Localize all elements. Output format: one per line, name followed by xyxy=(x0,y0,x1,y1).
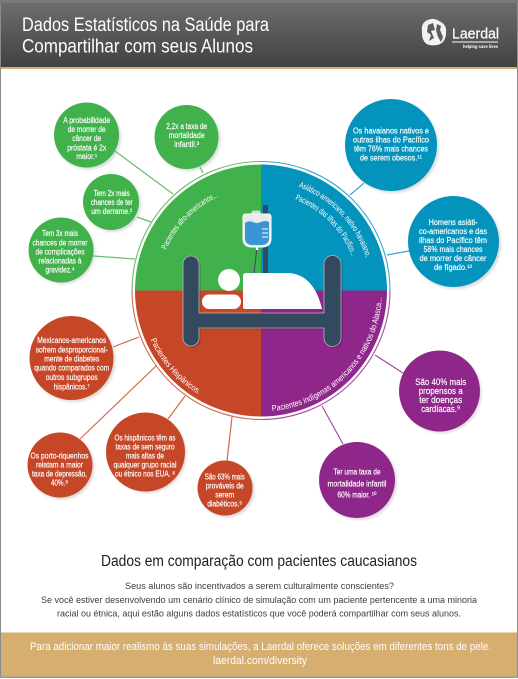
logo: Laerdal: Laerdal xyxy=(452,26,499,42)
icon: hospital bed with patient xyxy=(183,256,342,348)
circle: mortalidade infantil: mortalidade xyxy=(169,131,205,140)
circle: mortalidade infantil: infantil.³ xyxy=(174,140,199,149)
circle: diabetes mexicanos-americanos: outros subgrupos xyxy=(46,373,98,382)
circle: gravidez: de complicações xyxy=(36,248,84,256)
circle: diabetes mexicanos-americanos: mente de diabetes xyxy=(44,354,99,364)
circle: derrame: Tem 2x mais xyxy=(94,189,130,198)
circle: gravidez: gravidez.⁴ xyxy=(46,266,75,274)
circle: câncer de fígado: 58% mais chances xyxy=(424,245,482,254)
title: Dados Estatísticos na Saúde para xyxy=(22,15,269,36)
outer ring xyxy=(132,162,390,420)
circle: diabetes mexicanos-americanos: Mexicanos-americanos xyxy=(37,336,106,345)
circle: doenças cardíacas: São 40% mais xyxy=(415,376,466,387)
circle: câncer de fígado: co-americanos e das xyxy=(419,227,487,236)
intro paragraph: Seus alunos são incentivados a serem culturalmente conscientes? xyxy=(125,580,394,591)
circle: câncer de fígado xyxy=(408,196,501,289)
arc label: afro-americanos: Pacientes afro-americanos... xyxy=(161,196,218,250)
circle: sem seguro: Os hispânicos têm as xyxy=(114,433,176,442)
arc label: ilhas do Pacífico: Pacientes das Ilhas do Pacífico... xyxy=(296,194,354,256)
circle: derrame: chances de ter xyxy=(91,198,133,207)
circle: obesos xyxy=(345,99,439,193)
patient head xyxy=(218,269,240,291)
circle: sem seguro: taxas de sem seguro xyxy=(116,442,175,451)
circle: obesos: outras ilhas do Pacífico xyxy=(353,136,429,145)
circle: doenças cardíacas: ter doenças xyxy=(419,394,462,405)
circle: depressão: taxa de depressão, xyxy=(32,470,87,478)
circle: gravidez xyxy=(28,218,95,284)
pillow xyxy=(202,294,241,309)
intro paragraph xyxy=(41,580,478,618)
circle: doenças cardíacas: propensos a xyxy=(419,385,463,396)
circle: mortalidade infantil: 2,2x a taxa de xyxy=(166,122,208,131)
circle: sem seguro xyxy=(106,412,186,493)
circle: diabéticos: diabéticos.⁵ xyxy=(207,500,242,509)
title: Compartilhar com seus Alunos xyxy=(22,36,253,58)
circle: sem seguro: mais altas de xyxy=(126,451,164,460)
circle: mortalidade infantil indígena: mortalidade infantil xyxy=(328,480,387,488)
circle: depressão: relatam a maior xyxy=(36,460,83,470)
circle: diabéticos xyxy=(198,460,254,518)
logo: Laerdal: helping save lives xyxy=(463,44,499,49)
footer band xyxy=(0,632,518,679)
intro paragraph: racial ou étnica, aqui estão alguns dados estatísticos que você poderá compartilhar com seus alunos. xyxy=(57,608,461,618)
main circle xyxy=(132,162,390,420)
circle: diabetes mexicanos-americanos xyxy=(30,316,116,402)
heading: comparação: Dados em comparação com pacientes caucasianos xyxy=(101,553,417,570)
circle: diabéticos: prováveis de xyxy=(206,481,244,490)
circle: mortalidade infantil indígena: Ter uma taxa de xyxy=(334,468,381,476)
circle: diabetes mexicanos-americanos: quando comparados com xyxy=(34,364,109,372)
circle: gravidez: chances de morrer xyxy=(32,238,88,248)
arc label: asiático-americano: Asiático-americano, nativo havaiano, xyxy=(298,182,370,258)
icon: IV bag xyxy=(243,205,271,274)
circle: próstata: maior.¹ xyxy=(76,152,97,161)
circle: próstata: câncer de xyxy=(72,134,102,143)
title xyxy=(22,15,269,58)
circle: obesos: Os havaianos nativos e xyxy=(353,127,429,136)
circle: próstata: A probabilidade xyxy=(63,116,111,125)
circle: obesos: de serem obesos.¹¹ xyxy=(360,154,422,163)
circle: mortalidade infantil indígena: 60% maior. ¹⁰ xyxy=(338,490,376,500)
circle: próstata xyxy=(54,102,121,170)
circle: derrame xyxy=(83,174,141,232)
quadrant: hispânicos xyxy=(135,290,261,417)
circle: obesos: têm 76% mais chances xyxy=(354,145,428,154)
circle: depressão: 40%.⁸ xyxy=(51,478,68,488)
logo: Laerdal xyxy=(422,19,499,49)
circle: doenças cardíacas: cardíacas.⁹ xyxy=(421,403,460,414)
circle: mortalidade infantil indígena xyxy=(319,442,397,520)
circle: diabéticos: São 63% mais xyxy=(205,472,245,481)
circle: câncer de fígado: Homens asiáti- xyxy=(428,218,478,227)
circle: depressão: Os porto-riquenhos xyxy=(30,452,88,460)
circle: doenças cardíacas xyxy=(399,350,482,433)
circle: sem seguro: ou étnico nos EUA. ⁸ xyxy=(115,470,175,478)
circle: gravidez: Tem 3x mais xyxy=(42,229,78,238)
circle: diabetes mexicanos-americanos: hispânicos.⁷ xyxy=(54,382,90,391)
arc label: indígenas: Pacientes indígenas americanos e nativos do Alasca... xyxy=(272,298,382,411)
circle: próstata: de morrer de xyxy=(68,125,106,134)
circle: câncer de fígado: de morrer de câncer xyxy=(420,254,487,263)
circle: câncer de fígado: de fígado.¹² xyxy=(434,263,472,272)
connector lines xyxy=(80,151,409,461)
circle: diabéticos: serem xyxy=(215,490,234,499)
circle: próstata: próstata é 2x xyxy=(67,144,106,152)
quadrant: indígenas xyxy=(261,290,387,416)
header band xyxy=(0,0,518,69)
arc label: hispânicos: Pacientes Hispânicos. xyxy=(150,338,199,394)
quadrant: afro-americanos xyxy=(135,164,261,290)
circle: mortalidade infantil xyxy=(154,105,220,171)
circle: diabetes mexicanos-americanos: sofrem desproporcional- xyxy=(36,346,108,354)
blanket xyxy=(243,273,322,309)
circle: câncer de fígado: ilhas do Pacífico têm xyxy=(419,236,487,245)
circle: gravidez: relacionadas à xyxy=(38,256,82,266)
intro paragraph: Se você estiver desenvolvendo um cenário clínico de simulação com um paciente pertencente a uma minoria xyxy=(41,594,478,605)
circle: sem seguro: qualquer grupo racial xyxy=(114,460,177,470)
footer band: laerdal.com/diversity xyxy=(213,655,308,667)
circle: derrame: um derrame.² xyxy=(91,207,132,216)
circle: depressão xyxy=(28,432,94,500)
quadrant: asiático-americanos xyxy=(261,164,387,290)
